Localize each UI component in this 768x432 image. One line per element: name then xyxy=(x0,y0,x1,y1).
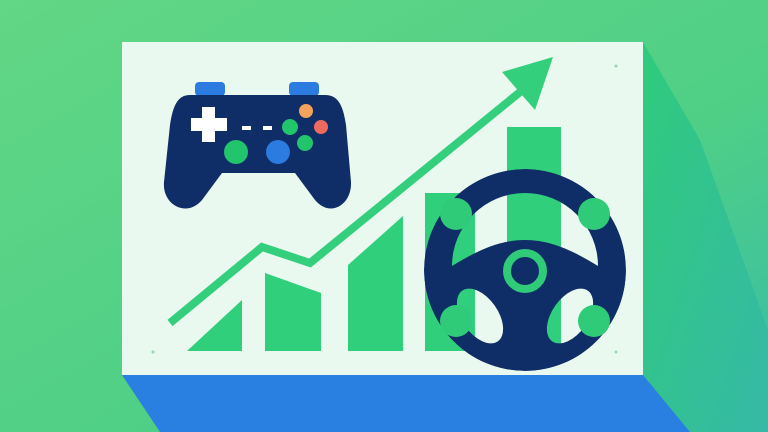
trend arrow xyxy=(170,57,553,323)
corner dots xyxy=(152,64,618,354)
icon: gamepad xyxy=(164,82,351,208)
board panel xyxy=(122,42,643,375)
bar chart xyxy=(187,127,561,351)
blue base xyxy=(122,375,690,432)
icon: steering wheel xyxy=(424,169,626,371)
panel shadow xyxy=(643,42,768,432)
